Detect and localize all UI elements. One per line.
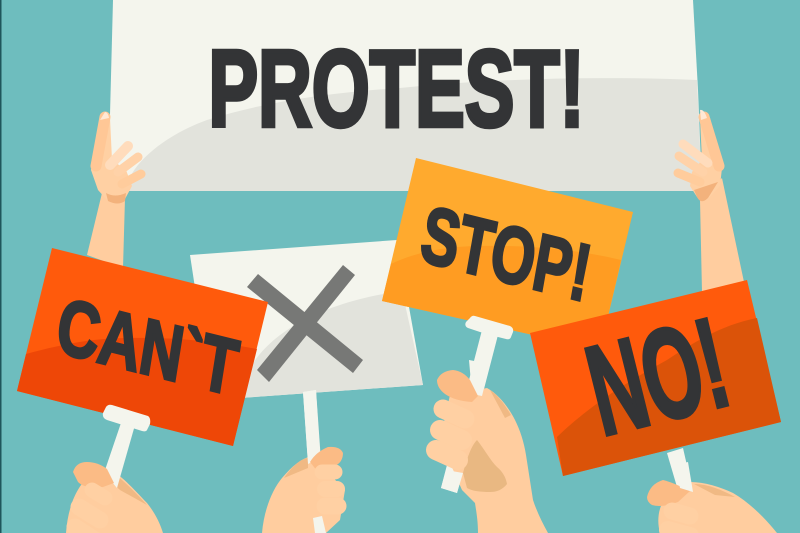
- panel: handle and hand holding blank sign: [262, 390, 345, 533]
- heading: PROTEST!: PROTEST!: [208, 28, 584, 150]
- text: STOP!: STOP!: [415, 188, 598, 318]
- panel: STOP sign: [382, 158, 633, 350]
- panel: handle and hand holding CAN'T sign: [66, 420, 163, 533]
- icon: X mark: [247, 265, 363, 382]
- icon: raised left hand: [87, 112, 141, 268]
- panel: hand holding STOP sign: [436, 316, 548, 533]
- icon: raised right hand: [678, 110, 744, 292]
- text: CAN'T: CAN`T: [51, 281, 244, 412]
- panel: CAN'T sign: [17, 248, 268, 446]
- panel: NO sign: [530, 280, 781, 476]
- panel: large protest banner: [108, 0, 702, 191]
- panel: blank sign with X: [190, 240, 423, 400]
- panel: NO sign handle and hand: [647, 448, 777, 533]
- icon: CAN'T handle grip: [103, 405, 150, 431]
